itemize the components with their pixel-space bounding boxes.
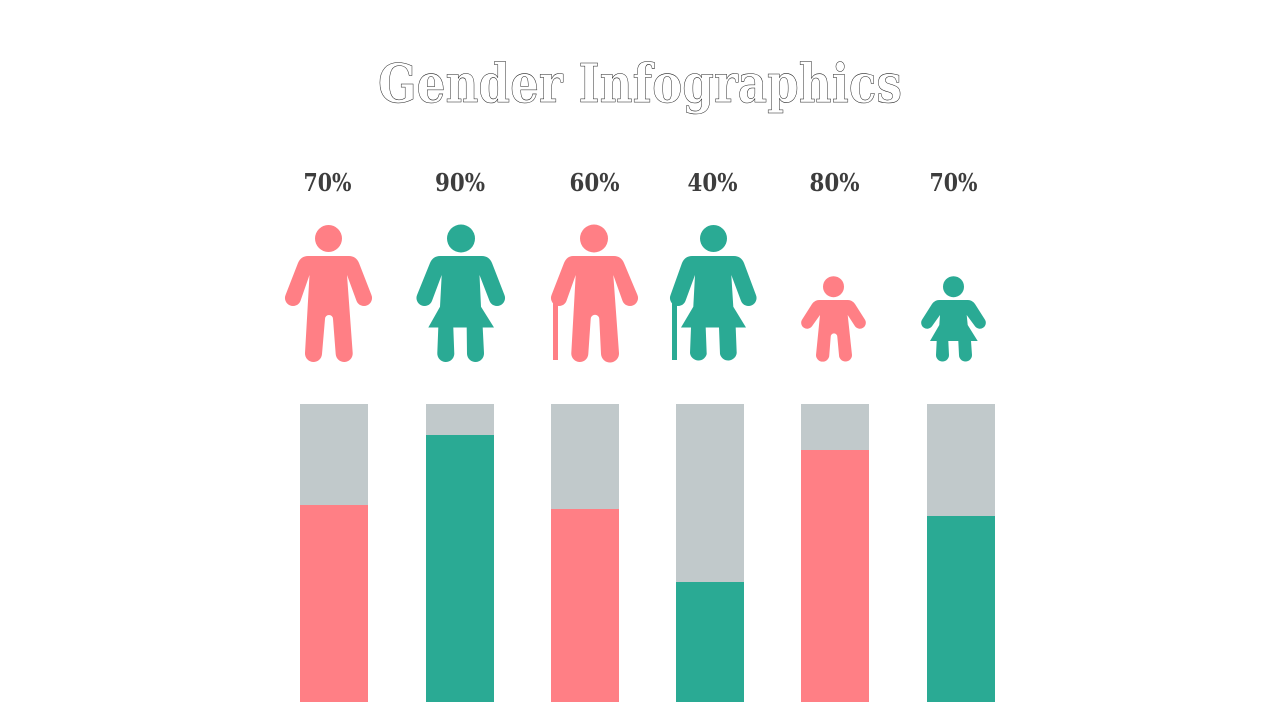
cane <box>553 300 558 360</box>
icon: elderly woman with cane <box>670 225 757 360</box>
bar: elderly man 60% <box>551 404 619 702</box>
icon: boy <box>801 276 866 362</box>
label: 90% woman: 90% <box>435 168 485 197</box>
label: 40% elderly woman: 40% <box>688 168 738 197</box>
label: 70% girl: 70% <box>930 168 978 197</box>
bar: elderly woman 40% <box>676 404 744 702</box>
label: 60% elderly man: 60% <box>570 168 620 197</box>
icon: woman <box>416 224 505 362</box>
label: 70% man: 70% <box>304 168 352 197</box>
icon: elderly man with cane <box>551 224 638 363</box>
icon: man <box>285 225 372 362</box>
title: Gender Infographics <box>378 53 902 115</box>
bar: girl 70% <box>927 404 995 702</box>
bar: woman 90% <box>426 404 494 702</box>
cane <box>672 303 677 360</box>
icon: girl <box>921 276 986 362</box>
label: 80% boy: 80% <box>810 168 860 197</box>
bar: man 70% <box>300 404 368 702</box>
bar: boy 80% <box>801 404 869 702</box>
